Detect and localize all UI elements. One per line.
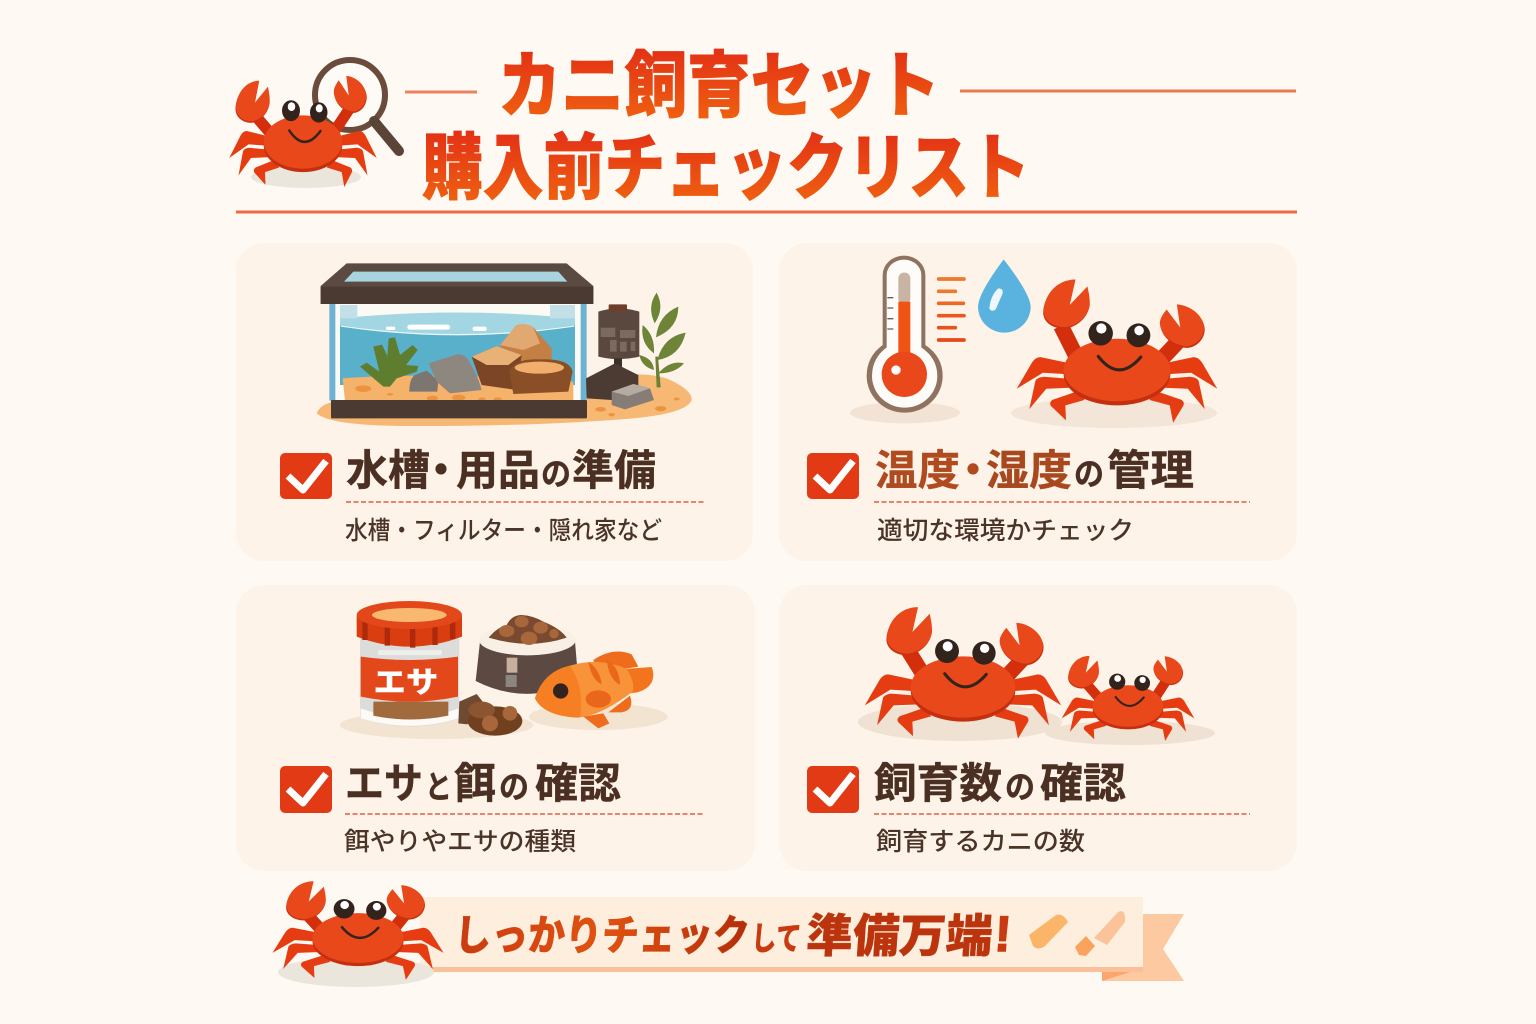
banner message [453, 906, 1013, 962]
panel: number of crabs [779, 585, 1297, 871]
heading: temperature and humidity: 管理 [1107, 447, 1194, 494]
description: temperature and humidity: 適切な環境かチェック [877, 517, 1134, 545]
illustration: small crab [1045, 656, 1215, 745]
heading: tank and supplies: 水槽 [346, 447, 430, 494]
heading: number of crabs: 飼育数 [874, 760, 1002, 807]
illustration: food jar, bowl and fish [340, 601, 668, 739]
heading: tank and supplies: ・ [420, 447, 462, 494]
checkbox [807, 766, 859, 813]
decorative marker strokes [1029, 911, 1125, 956]
checkbox [807, 453, 859, 499]
banner crab [272, 881, 444, 987]
ribbon [420, 897, 1184, 981]
banner message: しっかりチェック [453, 912, 751, 959]
heading: temperature and humidity: の [1074, 456, 1104, 492]
heading: temperature and humidity: ・ [952, 447, 994, 494]
heading: number of crabs: 確認 [1040, 760, 1126, 807]
heading: temperature and humidity: 湿度 [986, 447, 1072, 494]
illustration: crab [1011, 280, 1217, 428]
heading: food: 餌 [454, 760, 496, 807]
heading: food: エサ [345, 760, 423, 807]
heading: tank and supplies: 用品 [456, 447, 540, 494]
heading: food: 確認 [535, 760, 621, 807]
illustration: aquarium with filter and plant [317, 263, 692, 426]
illustration: large crab [858, 607, 1062, 741]
title: カニ飼育セット [498, 47, 940, 127]
header crab with magnifying glass [229, 60, 399, 188]
icon: thermometer [850, 256, 964, 423]
description: tank and supplies: 水槽・フィルター・隠れ家など [345, 517, 662, 545]
heading: tank and supplies: 準備 [572, 447, 656, 494]
heading: number of crabs: の [1005, 769, 1035, 805]
checkbox [280, 766, 332, 813]
panel: food [236, 585, 755, 871]
title [236, 47, 1297, 212]
description: food: 餌やりやエサの種類 [344, 828, 576, 856]
heading: temperature and humidity: 温度 [875, 447, 960, 494]
icon: water drop [978, 259, 1031, 333]
panel: temperature and humidity [779, 243, 1297, 561]
banner message: 準備万端 [805, 910, 994, 962]
heading: food: と [425, 769, 452, 805]
heading: tank and supplies: の [541, 456, 571, 492]
checkbox [280, 453, 332, 499]
illustration: food jar, bowl and fish: エサ [373, 666, 438, 699]
banner message: ! [993, 906, 1013, 962]
description: number of crabs: 飼育するカニの数 [876, 828, 1085, 856]
heading: food: の [499, 769, 529, 805]
panel: tank and supplies [236, 243, 753, 561]
banner [272, 881, 1184, 987]
title: 購入前チェックリスト [422, 129, 1030, 209]
banner message: して [750, 921, 803, 958]
